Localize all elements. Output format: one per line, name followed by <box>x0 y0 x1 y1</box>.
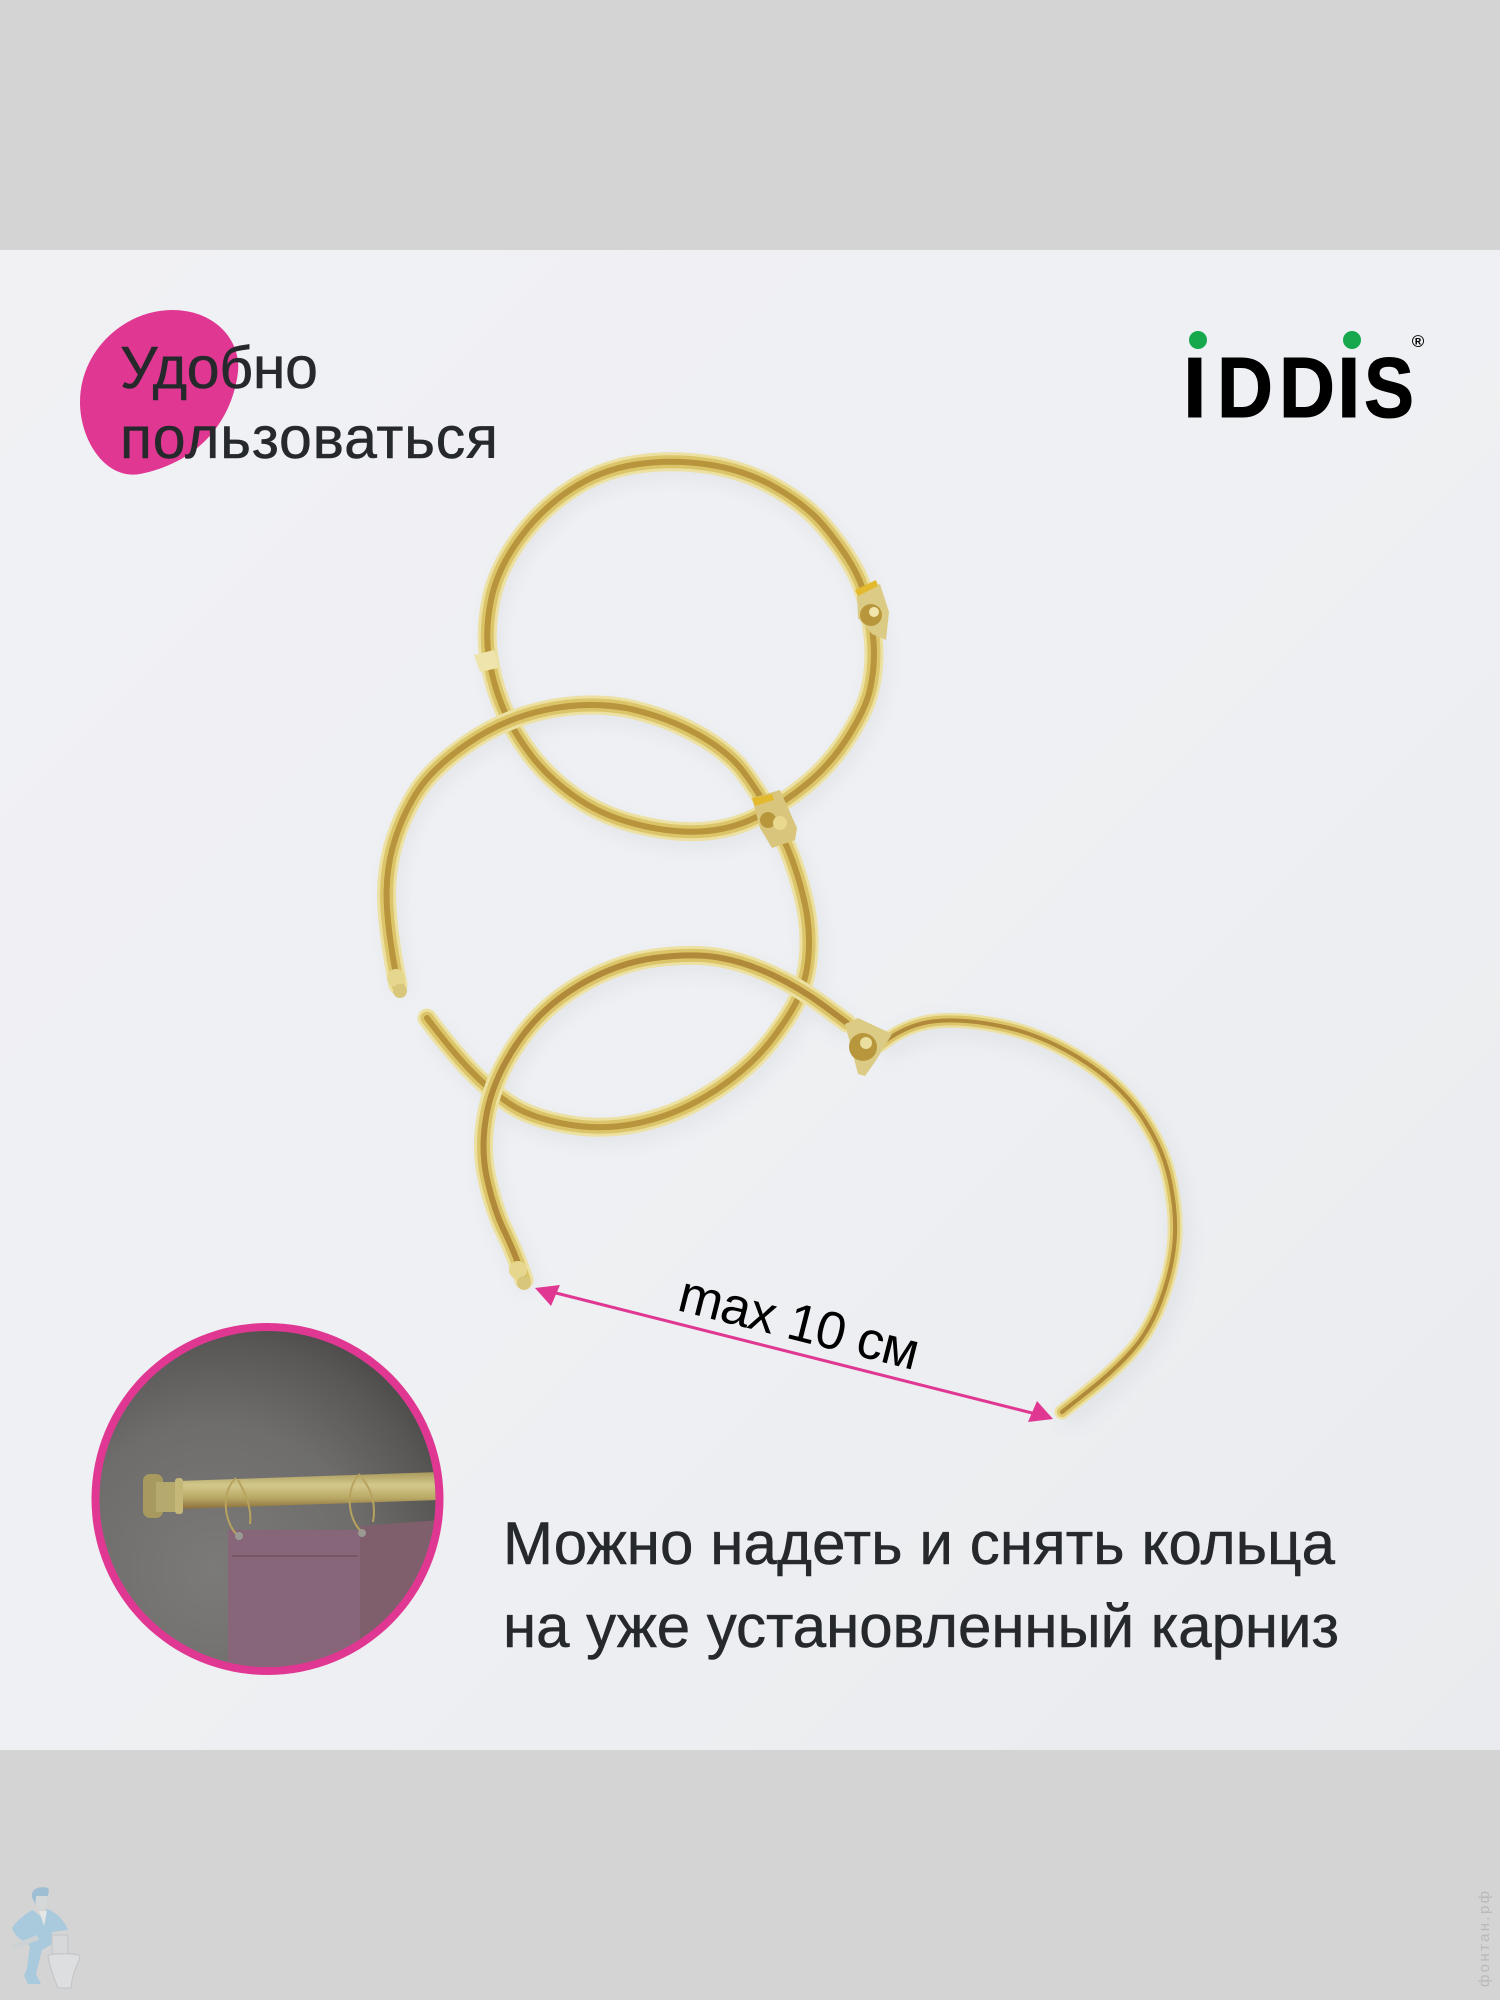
ring 3: bottom opened gold ring <box>484 955 1175 1412</box>
curtain rings on rod <box>226 1474 374 1536</box>
caption: Можно надеть и снять кольца <box>503 1510 1336 1577</box>
bottom grey band <box>0 1750 1500 2000</box>
inset photo: curtain rod with rings <box>90 1320 450 1680</box>
logo: IDDIS: ® <box>1412 332 1425 351</box>
caption: на уже установленный карниз <box>503 1593 1339 1660</box>
logo: IDDIS: D <box>1217 341 1273 436</box>
logo: IDDIS: I <box>1337 341 1361 436</box>
ring shadows <box>391 470 1179 1420</box>
logo: IDDIS: I <box>1183 341 1207 436</box>
ring 2: middle open gold ring <box>387 705 809 1127</box>
ring 1: top gold ring <box>474 462 889 832</box>
logo: IDDIS: S <box>1364 341 1414 436</box>
logo: IDDIS <box>1183 331 1425 436</box>
heading <box>120 335 498 471</box>
logo: IDDIS: D <box>1279 341 1335 436</box>
main light panel <box>0 250 1500 1750</box>
dimension arrow <box>535 1285 1053 1422</box>
curtain panel <box>228 1530 360 1680</box>
rod <box>178 1472 440 1509</box>
heading: пользоваться <box>120 405 498 471</box>
pink blob accent <box>80 310 238 475</box>
watermark: фонтан.рф <box>1476 1891 1493 1987</box>
top grey band <box>0 0 1500 250</box>
dimension label: max 10 см <box>673 1264 926 1382</box>
heading: Удобно <box>120 335 318 401</box>
mascot: plumber leaning on toilet <box>12 1887 80 1988</box>
caption <box>503 1510 1339 1660</box>
